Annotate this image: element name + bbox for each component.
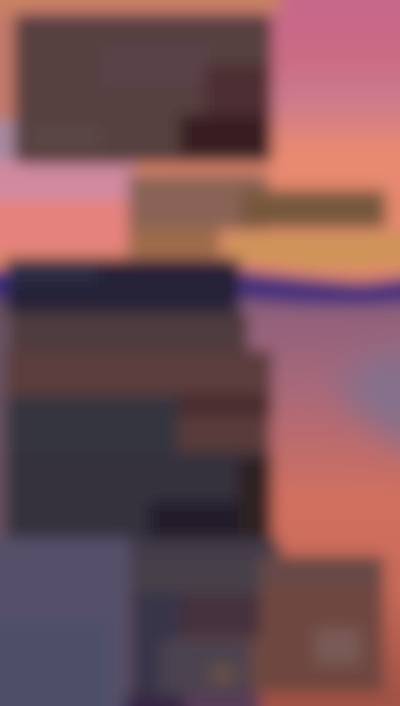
background: left sky edge and top glow: [0, 0, 280, 250]
panel: dark text block: [6, 396, 272, 540]
panel: bottom-right text card: [125, 556, 400, 706]
panel: bottom-left image block: [0, 538, 280, 706]
background sky: [0, 0, 400, 300]
panel: tagline strip: [128, 174, 386, 256]
left page edge beside the panels: [0, 300, 10, 540]
background: lavender water wedge: [335, 345, 400, 460]
panel: top text card: [14, 14, 272, 164]
horizon: orange glow band: [225, 234, 400, 268]
horizon: purple band: [0, 270, 400, 306]
panel: brown text block: [6, 312, 272, 455]
panel: navy heading block: [0, 258, 240, 314]
background water: [0, 295, 400, 706]
